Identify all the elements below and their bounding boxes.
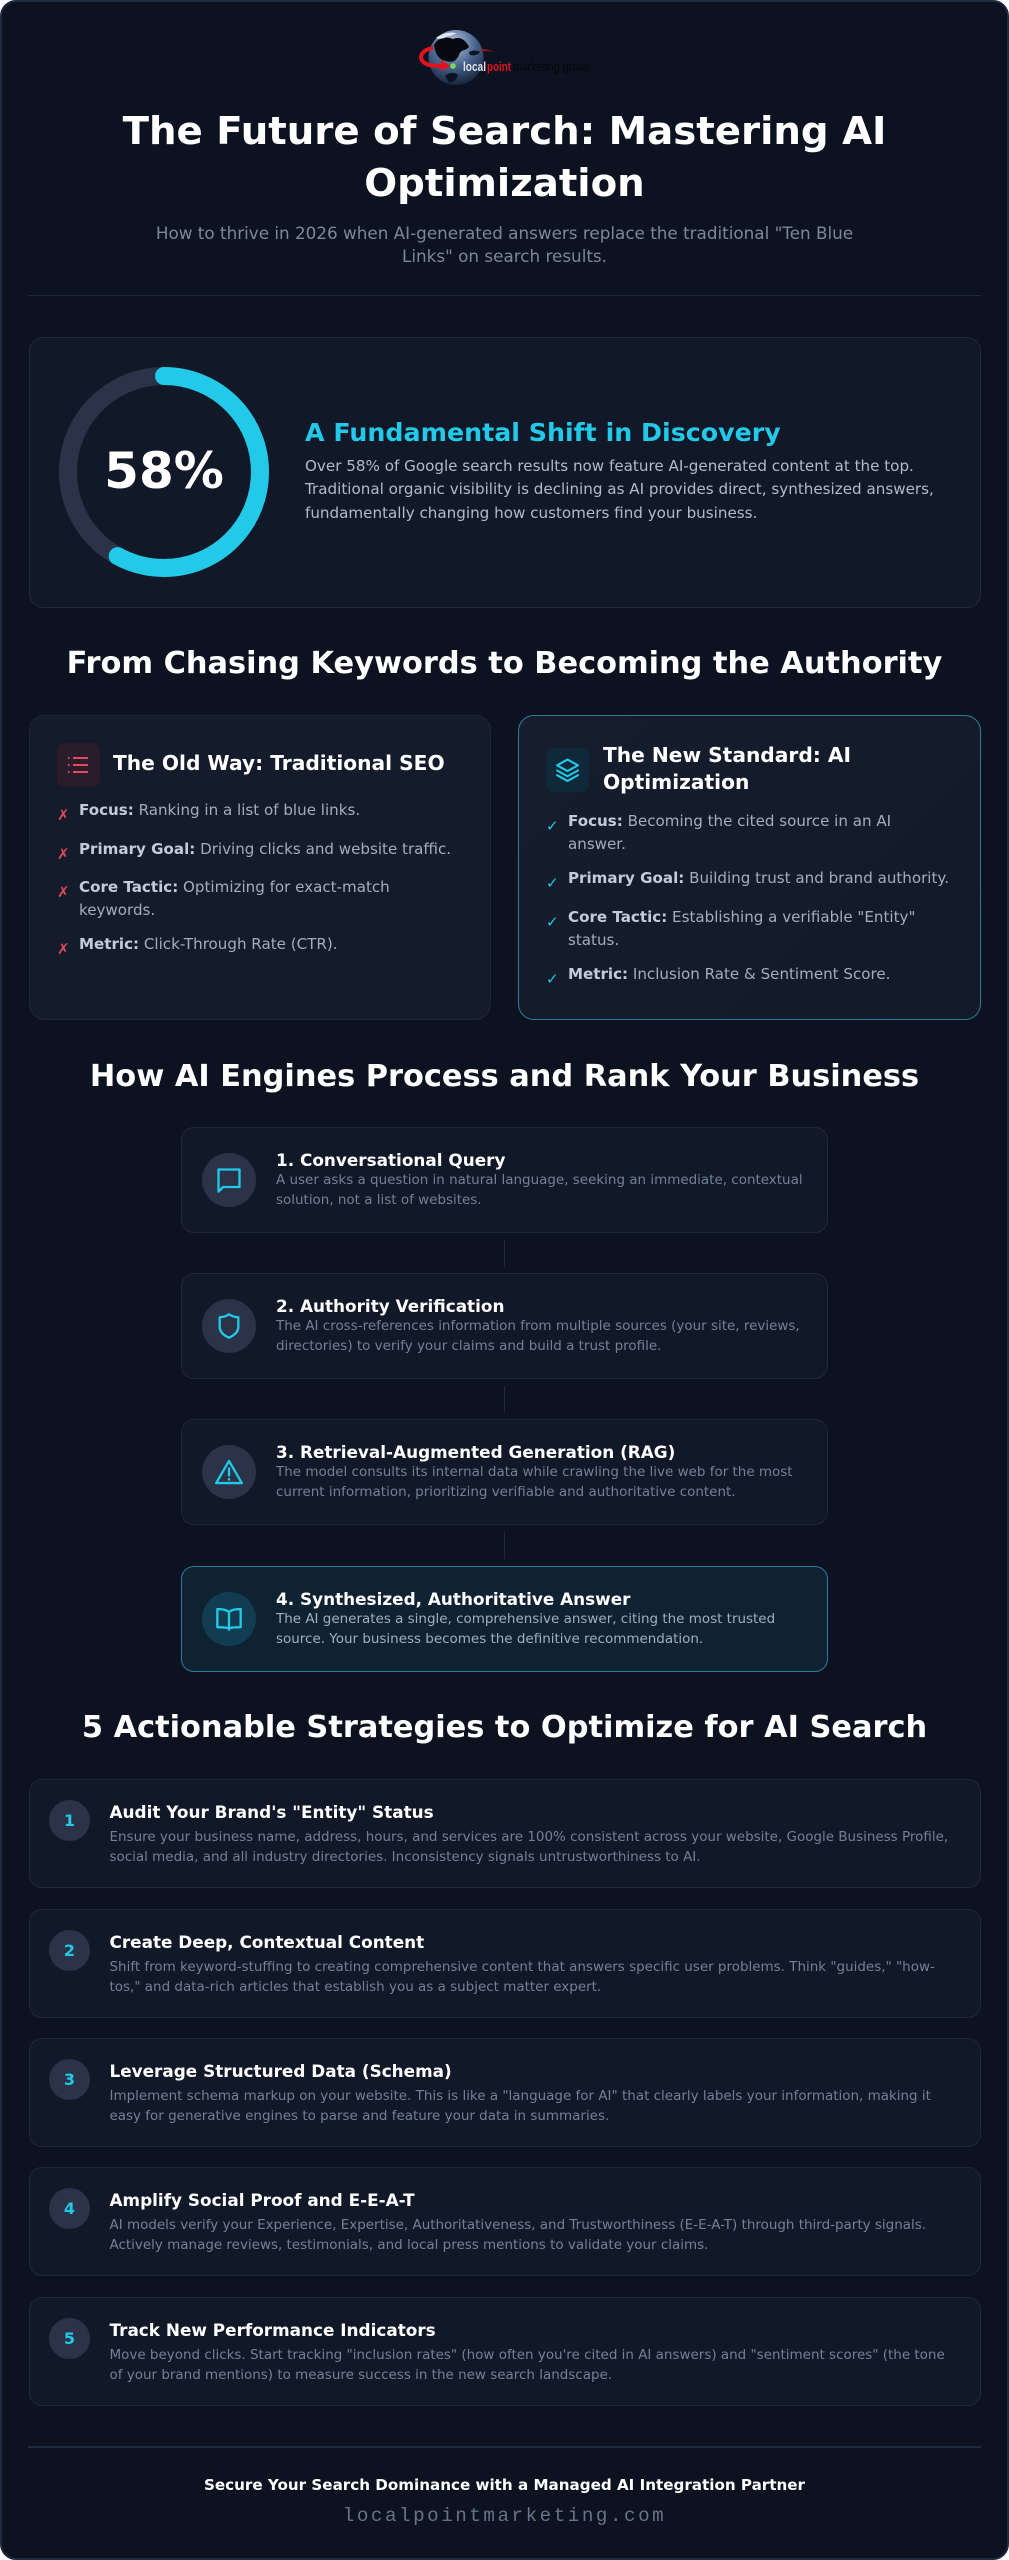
footer url: localpointmarketing.com (343, 2505, 666, 2527)
badge 4: 4 (64, 2199, 75, 2218)
step 3 text: 3. Retrieval-Augmented Generation (RAG) (276, 1442, 675, 1462)
strategy 5 text: Move beyond clicks. Start tracking "inclusion rates" (how often you're cited in AI answers) and "sentiment scores" (the tone (110, 2346, 945, 2362)
new standard list: answer. (568, 835, 626, 853)
strategy 4 text (110, 2190, 926, 2253)
old way list: Metric: Click-Through Rate (CTR). (79, 935, 338, 953)
heading: process: How AI Engines Process and Rank Your Business (90, 1059, 919, 1094)
strategy 5 (29, 2297, 981, 2406)
strategy 2 text: tos," and data-rich articles that establish you as a subject matter expert. (110, 1979, 601, 1995)
strategy 1 text: social media, and all industry directories. Inconsistency signals untrustworthiness to AI. (110, 1849, 701, 1865)
connector 1 (504, 1240, 505, 1267)
icon: chat bubble (202, 1153, 256, 1207)
icon: warning triangle (202, 1445, 256, 1499)
step 3: retrieval-augmented generation (181, 1419, 828, 1525)
new standard list: Focus: Becoming the cited source in an AI (568, 812, 891, 830)
statistic description: Traditional organic visibility is declining as AI provides direct, synthesized answers, (305, 480, 934, 498)
icon: open book (202, 1592, 256, 1646)
panel: new standard (518, 715, 981, 1020)
strategy 4 text: Amplify Social Proof and E-E-A-T (110, 2190, 415, 2210)
old way list: ✗ (57, 845, 70, 863)
badge 2: 2 (64, 1941, 75, 1960)
logo: point (487, 59, 512, 74)
new standard title: The New Standard: AI (603, 743, 851, 767)
heading: strategies: 5 Actionable Strategies to Optimize for AI Search (82, 1710, 927, 1745)
footer divider (28, 2446, 981, 2448)
badge 1 (49, 1800, 90, 1841)
step 1 text: A user asks a question in natural language, seeking an immediate, contextual (276, 1172, 803, 1188)
old way list: ✗ (57, 940, 70, 958)
icon: shield (202, 1299, 256, 1353)
donut chart: 58% (59, 367, 269, 577)
strategy 1 text: Audit Your Brand's "Entity" Status (110, 1802, 434, 1822)
badge 5 (49, 2318, 90, 2359)
strategy 2 (29, 1909, 981, 2018)
strategy 3 text (110, 2061, 931, 2124)
step 2 text (276, 1296, 800, 1354)
strategy 3 text: easy for generative engines to parse and feature your data in summaries. (110, 2108, 609, 2124)
strategy 4 text: Actively manage reviews, testimonials, and local press mentions to validate your claims. (110, 2237, 708, 2253)
footer call to action: Secure Your Search Dominance with a Managed AI Integration Partner (204, 2476, 805, 2494)
heading: comparison: From Chasing Keywords to Becoming the Authority (67, 646, 942, 681)
new standard list: ✓ (546, 817, 559, 835)
strategy 3 text: Implement schema markup on your website. This is like a "language for AI" that clearly labels your information, making it (110, 2088, 931, 2104)
badge 3: 3 (64, 2070, 75, 2089)
old way list: keywords. (79, 901, 155, 919)
step 4 text: The AI generates a single, comprehensive answer, citing the most trusted (276, 1611, 775, 1627)
icon: list (57, 743, 100, 787)
strategy 5 text: of your brand mentions) to measure success in the new search landscape. (110, 2367, 612, 2383)
strategy 4 text: AI models verify your Experience, Expertise, Authoritativeness, and Trustworthiness (E-E-A-T) through third-party signals. (110, 2216, 926, 2232)
title (122, 109, 886, 206)
step 1 text: solution, not a list of websites. (276, 1192, 482, 1208)
strategy 1 (29, 1779, 981, 1888)
statistic description (304, 457, 934, 522)
logo (419, 30, 590, 85)
new standard list (546, 812, 949, 988)
new standard list: status. (568, 931, 619, 949)
step 1: conversational query (181, 1127, 828, 1233)
logo: local (463, 59, 486, 74)
panel: old way (29, 715, 491, 1020)
badge 1: 1 (64, 1811, 75, 1830)
strategy 1 text (110, 1802, 948, 1865)
badge 3 (49, 2059, 90, 2100)
statistic description: Over 58% of Google search results now feature AI-generated content at the top. (305, 457, 914, 475)
step 4 text (276, 1589, 775, 1647)
icon: layers (546, 748, 589, 792)
old way list: Focus: Ranking in a list of blue links. (79, 801, 360, 819)
connector 3 (504, 1532, 505, 1559)
header divider (28, 295, 981, 296)
subtitle (156, 223, 853, 266)
statistic description: fundamentally changing how customers find your business. (305, 504, 757, 522)
title: Optimization (364, 161, 645, 206)
new standard list: Core Tactic: Establishing a verifiable "Entity" (568, 908, 915, 926)
strategy 5 text (110, 2320, 945, 2383)
badge 5: 5 (64, 2329, 75, 2348)
step 2: authority verification (181, 1273, 828, 1379)
step 2 text: directories) to verify your claims and build a trust profile. (276, 1338, 661, 1354)
step 3 text: current information, prioritizing verifiable and authoritative content. (276, 1484, 736, 1500)
new standard list: ✓ (546, 913, 559, 931)
title: The Future of Search: Mastering AI (123, 109, 886, 154)
new standard list: ✓ (546, 970, 559, 988)
old way list: Core Tactic: Optimizing for exact-match (79, 878, 390, 896)
statistic heading: A Fundamental Shift in Discovery (305, 418, 781, 447)
strategy 3 text: Leverage Structured Data (Schema) (110, 2061, 452, 2081)
old way title: The Old Way: Traditional SEO (113, 751, 445, 775)
new standard title (603, 743, 851, 794)
subtitle: How to thrive in 2026 when AI-generated answers replace the traditional "Ten Blue (156, 223, 853, 243)
new standard list: Primary Goal: Building trust and brand authority. (568, 869, 949, 887)
step 3 text: The model consults its internal data while crawling the live web for the most (276, 1464, 793, 1480)
step 4: synthesized answer (181, 1566, 828, 1672)
strategy 2 text: Shift from keyword-stuffing to creating comprehensive content that answers specific user problems. Think "guides," "how- (110, 1958, 935, 1974)
step 1 text: 1. Conversational Query (276, 1150, 505, 1170)
badge 4 (49, 2188, 90, 2229)
panel: key statistic (29, 337, 981, 608)
old way list (57, 801, 451, 958)
step 4 text: source. Your business becomes the definitive recommendation. (276, 1631, 703, 1647)
connector 2 (504, 1386, 505, 1413)
strategy 1 text: Ensure your business name, address, hours, and services are 100% consistent across your website, Google Business Profile, (110, 1828, 948, 1844)
strategy 5 text: Track New Performance Indicators (110, 2320, 436, 2340)
old way list: ✗ (57, 883, 70, 901)
strategy 3 (29, 2038, 981, 2147)
new standard title: Optimization (603, 770, 749, 794)
strategy 2 text: Create Deep, Contextual Content (110, 1932, 424, 1952)
new standard list: ✓ (546, 874, 559, 892)
step 2 text: 2. Authority Verification (276, 1296, 504, 1316)
step 2 text: The AI cross-references information from multiple sources (your site, reviews, (276, 1318, 800, 1334)
step 3 text (276, 1442, 793, 1500)
old way list: ✗ (57, 806, 70, 824)
strategy 2 text (110, 1932, 935, 1995)
donut chart: 58%: 58% (104, 442, 224, 500)
step 1 text (276, 1150, 803, 1208)
step 4 text: 4. Synthesized, Authoritative Answer (276, 1589, 630, 1609)
subtitle: Links" on search results. (402, 246, 607, 266)
strategy 4 (29, 2167, 981, 2276)
new standard list: Metric: Inclusion Rate & Sentiment Score. (568, 965, 890, 983)
old way list: Primary Goal: Driving clicks and website traffic. (79, 840, 451, 858)
badge 2 (49, 1930, 90, 1971)
